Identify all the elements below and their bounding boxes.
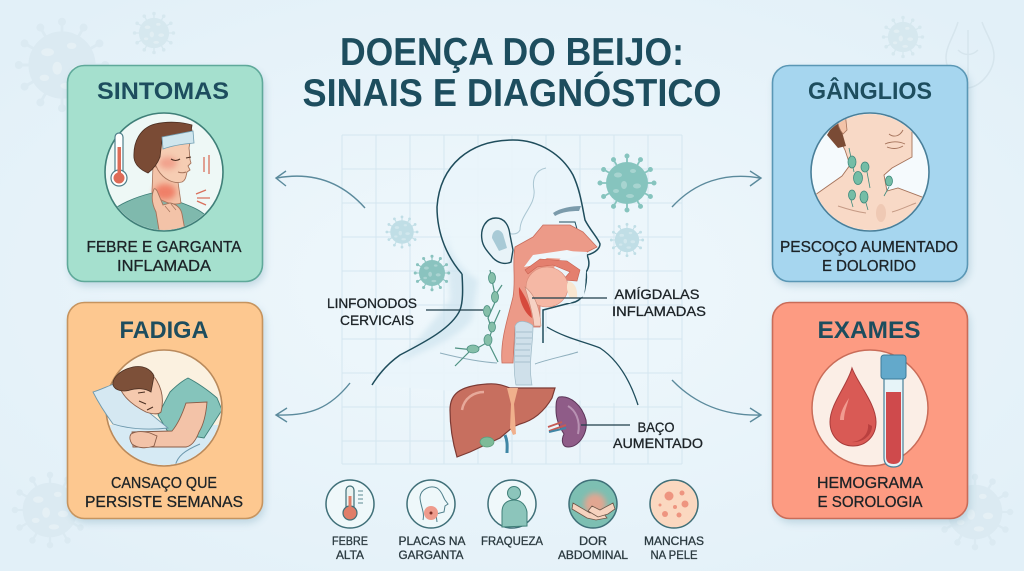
symptom: fraqueza [481,480,543,548]
icon: thermometer [111,133,127,186]
caption: fadiga [85,475,243,511]
arrow: to gânglios [672,171,761,207]
icon: feverish man [105,113,223,236]
label: amígdalas inflamadas: INFLAMADAS [612,303,706,319]
icon: sleeping person [93,350,230,475]
virus: pale right [611,224,643,256]
heading: gânglios: GÂNGLIOS [808,77,932,105]
symptom: placas na garganta: GARGANTA [398,548,464,562]
symptom: manchas na pele: NA PELE [650,548,698,562]
light palate band [524,250,583,267]
caption: exames [817,475,923,511]
shirt [117,192,204,230]
title [302,31,722,115]
symptom: dor abdominal [558,480,628,562]
symptom: manchas na pele [644,480,704,562]
label: baço aumentado [581,419,703,451]
caption: sintomas [86,239,242,275]
title: DOENÇA DO BEIJO: [340,31,684,74]
title: SINAIS E DIAGNÓSTICO [302,71,722,115]
trachea [514,321,533,385]
caption: exames: HEMOGRAMA [817,475,923,492]
symptom: placas na garganta [398,480,466,562]
panel: sintomas [68,66,265,286]
hair [827,124,846,148]
arrow: to exames [672,380,761,422]
skin [816,114,922,230]
symptom: febre alta [326,480,374,562]
face [154,130,192,182]
ear [482,218,513,263]
shirt [158,378,222,438]
label: linfonodos cervicais: LINFONODOS [327,295,417,311]
virus: pale left [387,217,417,247]
label: amígdalas inflamadas [532,286,706,319]
caption: gânglios: PESCOÇO AUMENTADO [780,239,958,256]
lymph nodes [455,270,502,366]
panel: fadiga [68,302,265,523]
heading: fadiga: FADIGA [120,317,208,344]
anatomy grid [342,135,682,464]
caption: fadiga: PERSISTE SEMANAS [85,494,243,511]
blanket [110,425,218,465]
teeth [567,281,577,298]
virus: large green [600,156,654,210]
tongue [526,267,568,307]
symptom: placas na garganta: PLACAS NA [398,534,466,548]
panel: gânglios [772,66,970,286]
caption: gânglios [780,239,958,275]
heading: sintomas: SINTOMAS [97,78,229,105]
label: baço aumentado: BAÇO [638,419,675,435]
inflamed tonsil [519,287,532,318]
caption: sintomas: FEBRE E GARGANTA [86,239,242,256]
nasal cavity and throat [502,225,597,363]
test tube [884,378,903,467]
heading: exames: EXAMES [818,317,920,344]
spleen [548,397,586,447]
blood drop [830,368,876,446]
head silhouette [372,140,638,405]
liver [450,384,555,457]
chest lines [440,352,578,364]
label: linfonodos cervicais: CERVICAIS [340,312,414,328]
caption: sintomas: INFLAMADA [117,258,211,275]
label: linfonodos cervicais [327,295,483,328]
symptom: fraqueza: FRAQUEZA [481,534,543,548]
head [120,375,162,414]
eyebrow and eye [553,206,581,216]
hair [134,122,192,173]
hair [113,366,154,392]
symptom: febre alta: ALTA [336,548,364,562]
caption: exames: E SOROLOGIA [818,494,923,511]
symptom: manchas na pele: MANCHAS [644,534,704,548]
icon: blood drop and test tube [812,350,928,467]
hand [130,432,157,448]
caption: gânglios: E DOLORIDO [822,258,916,275]
chin skin below nose [545,251,587,303]
label: amígdalas inflamadas: AMÍGDALAS [614,286,700,302]
arrow: to sintomas [276,171,365,208]
lymph nodes [848,148,892,210]
arm [132,402,207,447]
symptom: febre alta: FEBRE [332,534,368,548]
compress [162,131,194,149]
label: baço aumentado: AUMENTADO [613,435,703,451]
palate arch [525,259,580,281]
panel: exames [772,302,970,523]
virus: green left [415,256,449,290]
symptom: dor abdominal: ABDOMINAL [558,548,628,562]
neck [152,165,181,204]
symptom: dor abdominal: DOR [579,534,607,548]
caption: fadiga: CANSAÇO QUE [111,475,217,492]
hand on throat [152,188,185,230]
central anatomy: head and organs [372,140,638,457]
arrow: to fadiga [276,383,350,422]
icon: swollen neck [810,110,930,240]
pillow [93,384,168,429]
